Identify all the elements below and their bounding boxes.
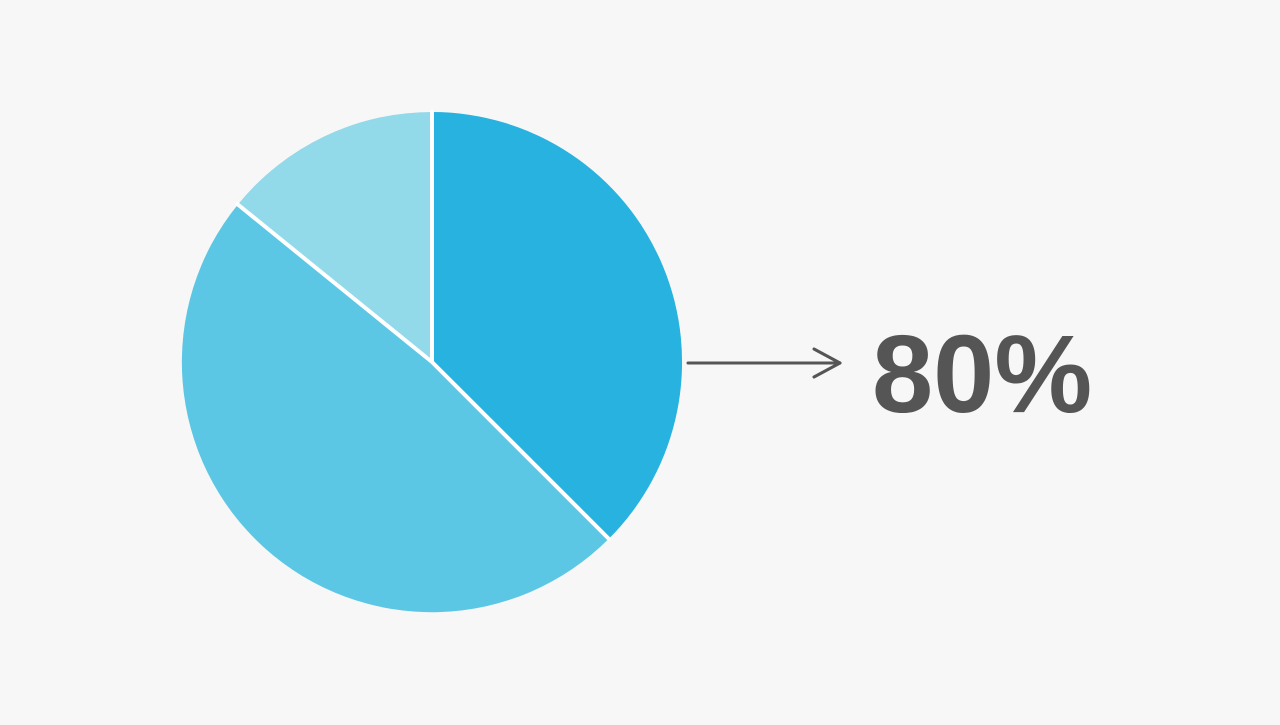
slice: dark: [432, 112, 682, 539]
percentage label: 80%: [872, 313, 1092, 436]
slice dividers: [236, 110, 610, 540]
arrow: [688, 349, 840, 377]
slice: medium: [182, 205, 609, 612]
pie chart: [182, 110, 682, 612]
slice: light: [238, 112, 432, 362]
